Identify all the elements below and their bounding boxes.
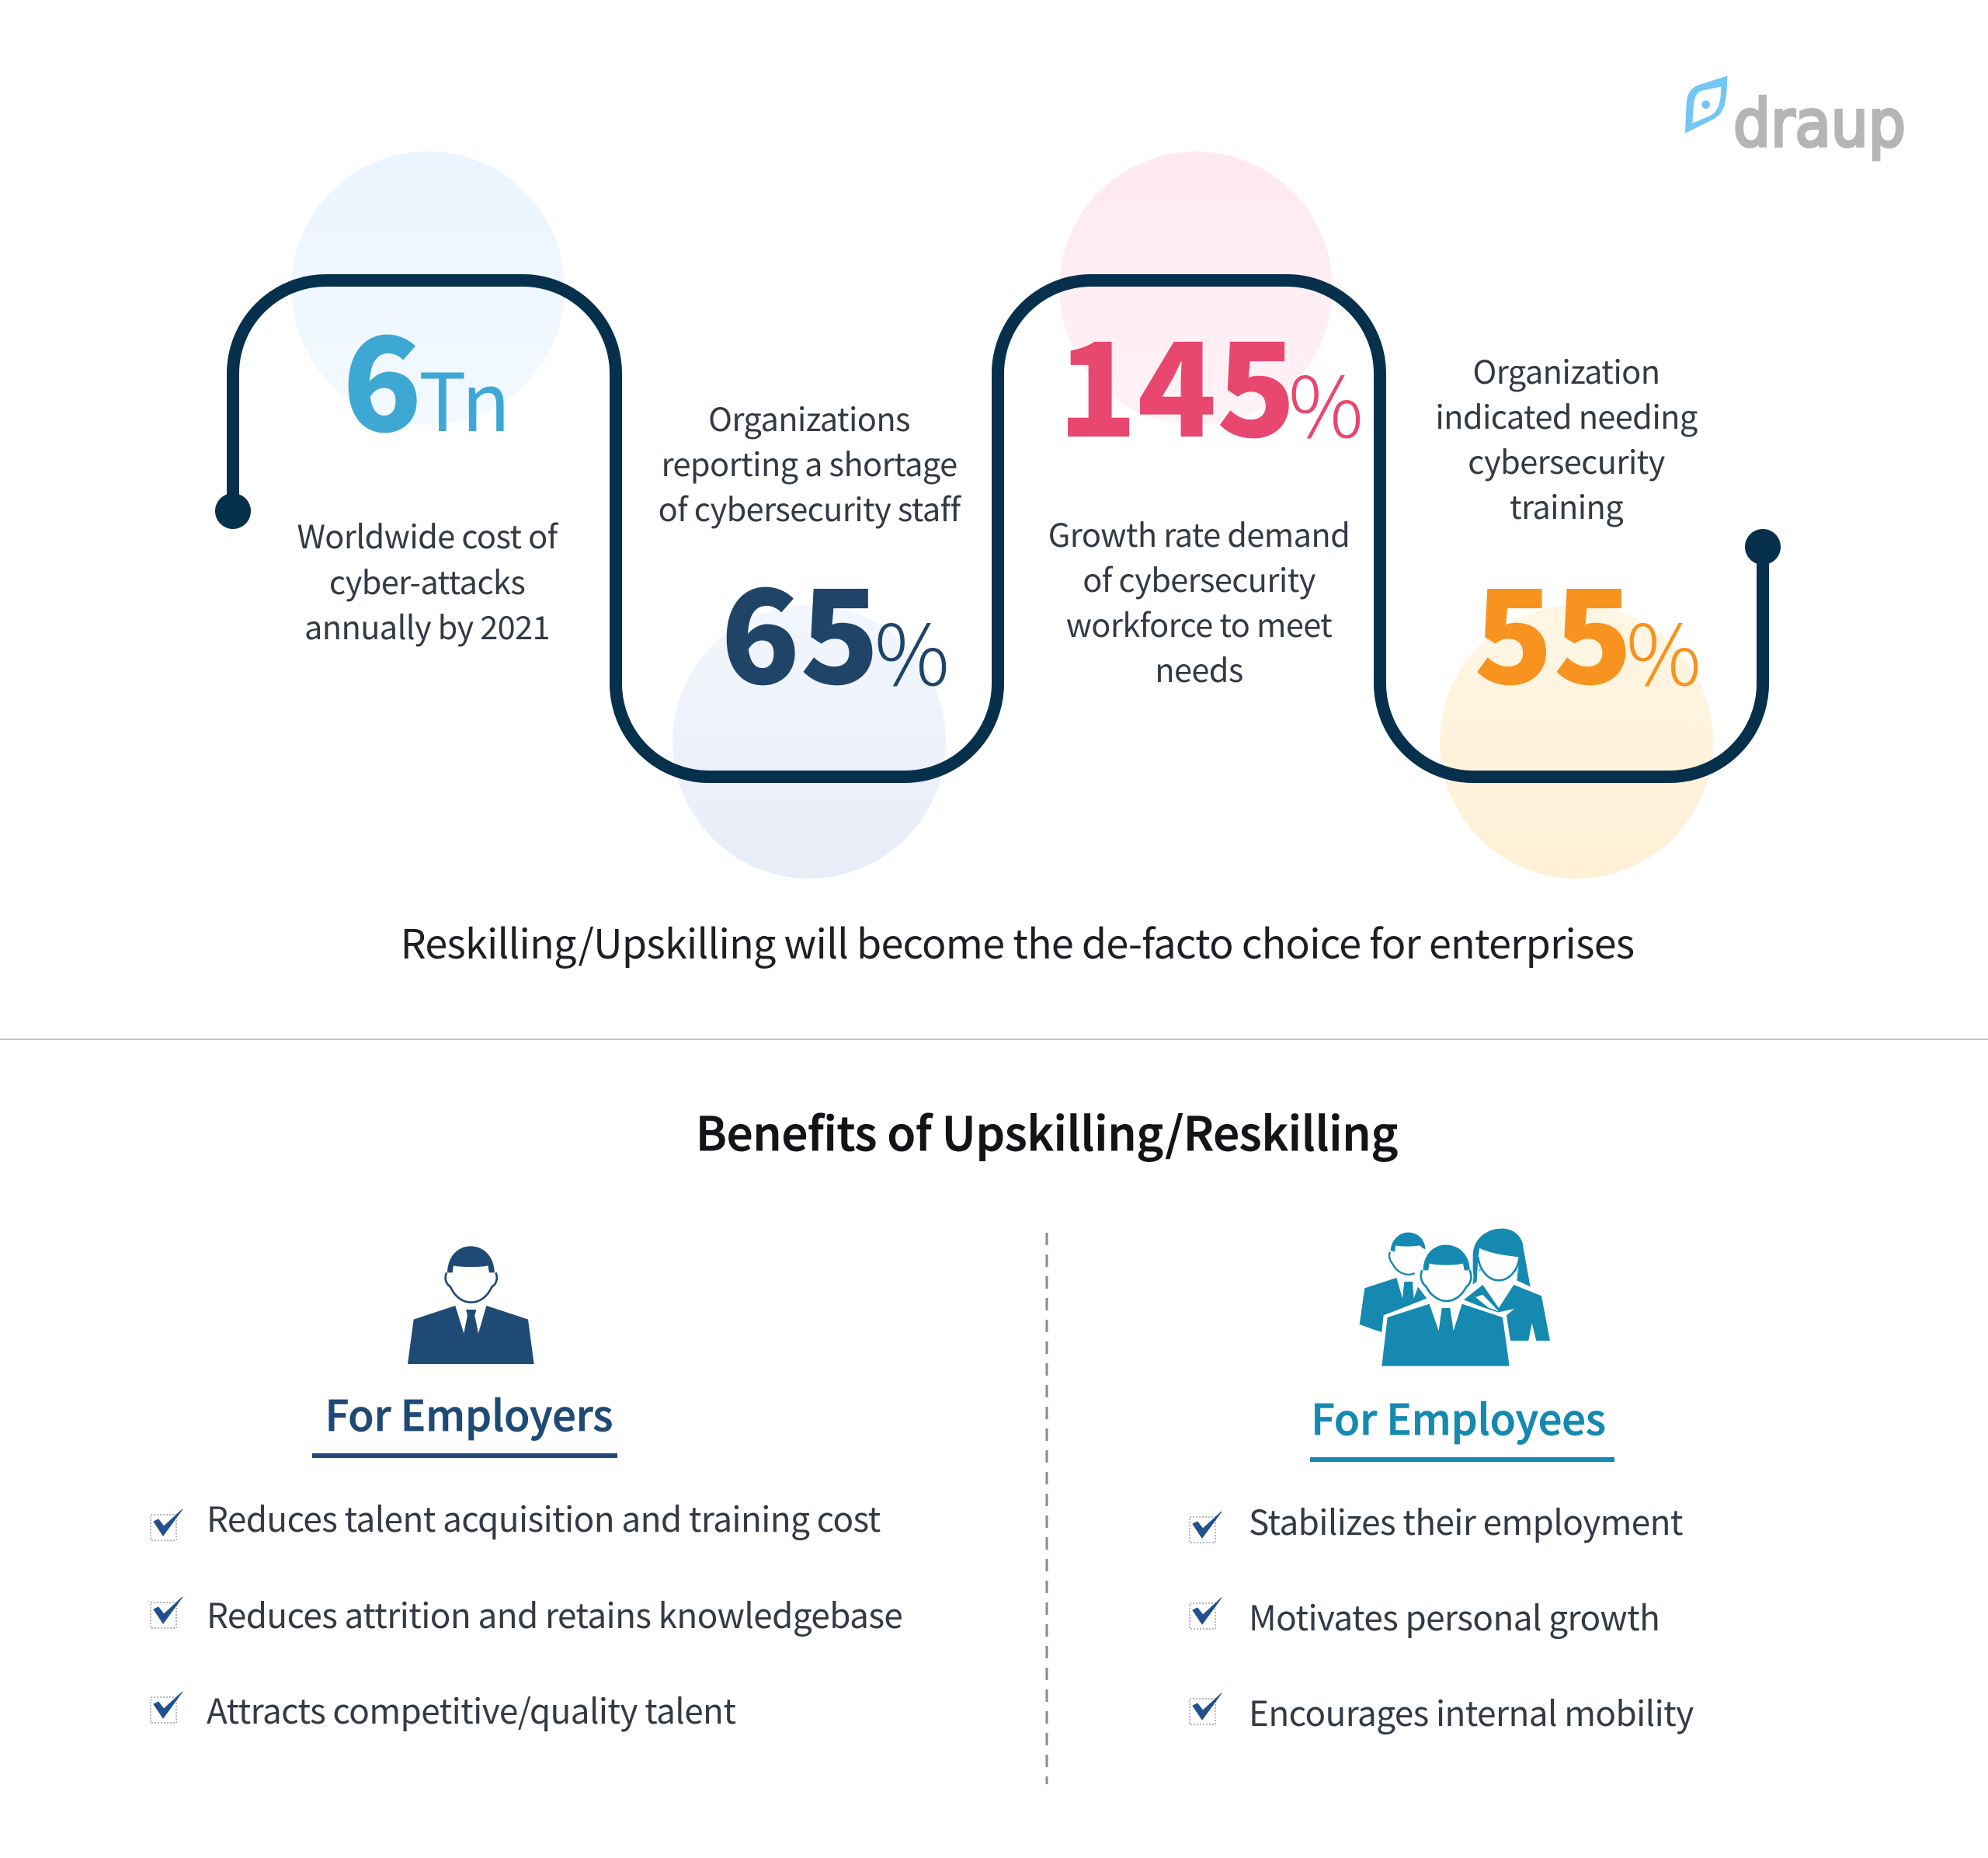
text: organization training: training xyxy=(1510,482,1623,528)
text: growth rate: of cybersecurity xyxy=(1083,555,1316,601)
icon: logo mark xyxy=(1685,76,1727,134)
stat: 145%: 145 xyxy=(1058,286,1296,475)
column divider xyxy=(1045,1233,1048,1784)
item: talent cost: Reduces talent acquisition and training cost xyxy=(207,1492,881,1542)
back man xyxy=(1360,1233,1427,1332)
winding timeline path xyxy=(215,280,1781,777)
decorative circle: indigo xyxy=(673,605,946,879)
label: for employers: For Employers xyxy=(325,1382,613,1443)
woman xyxy=(1464,1229,1550,1341)
icon: employer xyxy=(408,1246,534,1364)
logo wordmark: draup xyxy=(1733,85,1906,162)
text: worldwide cost: cyber-attacks xyxy=(329,557,525,604)
text: organization training: indicated needing xyxy=(1435,391,1698,438)
stat: 65%: % xyxy=(874,589,950,710)
text: growth rate: needs xyxy=(1155,645,1243,691)
item: employment: Stabilizes their employment xyxy=(1249,1495,1683,1545)
list: employees benefits xyxy=(1190,1495,1694,1736)
text: growth rate: Growth rate demand xyxy=(1048,510,1350,556)
item: mobility: Encourages internal mobility xyxy=(1249,1686,1694,1736)
text: organizations shortage: of cybersecurity staff xyxy=(659,484,961,531)
text: organizations shortage: reporting a shortage xyxy=(661,439,958,485)
stat: 6 Tn xyxy=(342,280,509,469)
item: attracts talent: Attracts competitive/quality talent xyxy=(207,1684,735,1734)
item: attrition: Reduces attrition and retains knowledgebase xyxy=(207,1588,902,1638)
text: worldwide cost: Worldwide cost of xyxy=(297,511,559,558)
front man xyxy=(1382,1245,1510,1366)
decorative circle: orange xyxy=(1440,605,1713,879)
text: worldwide cost: annually by 2021 xyxy=(304,602,550,649)
decorative circle: light blue xyxy=(291,151,565,425)
stat: 145%: % xyxy=(1288,341,1364,462)
text: growth rate: workforce to meet xyxy=(1066,600,1333,646)
stat: 65% xyxy=(721,533,950,722)
item: growth: Motivates personal growth xyxy=(1249,1591,1660,1641)
decorative circle: pink xyxy=(1059,151,1333,425)
text: organization training: Organization xyxy=(1473,346,1660,393)
icon: employees xyxy=(1360,1229,1550,1366)
label: for employees: For Employees xyxy=(1311,1386,1606,1447)
logo: draup xyxy=(1685,76,1906,162)
stat: 65%: 65 xyxy=(721,533,880,722)
stat: 55% xyxy=(1474,533,1701,722)
stat: 55%: 55 xyxy=(1474,533,1633,722)
heading: benefits: Benefits of Upskilling/Reskilling xyxy=(696,1098,1398,1164)
stat: 6 Tn: 6 xyxy=(342,280,422,469)
list: employers benefits xyxy=(151,1492,902,1734)
section divider xyxy=(0,1039,1988,1040)
stat: 6 Tn: Tn xyxy=(419,339,509,454)
stat: 55%: % xyxy=(1626,589,1701,710)
text: organization training: cybersecurity xyxy=(1468,437,1666,483)
headline: Reskilling/Upskilling will become the de-facto choice for enterprises xyxy=(401,912,1634,970)
text: organizations shortage: Organizations xyxy=(708,394,910,440)
